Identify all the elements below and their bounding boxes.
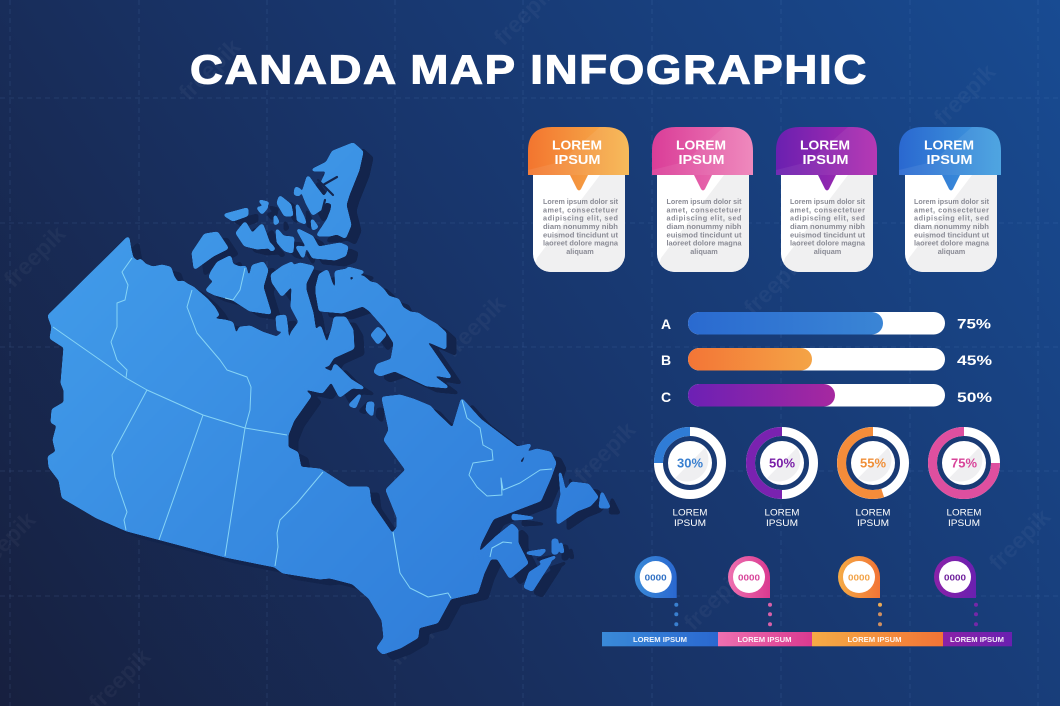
bar B — [661, 348, 993, 370]
map shadow — [59, 150, 619, 659]
card text: adipiscing elit, sed — [666, 214, 742, 223]
card text — [790, 197, 866, 256]
watermarks: freepik — [678, 563, 750, 635]
watermarks: freepik — [738, 248, 810, 320]
bar A: 75% — [957, 316, 992, 332]
card text: amet, consectetuer — [914, 205, 989, 214]
card text: Lorem ipsum dolor sit — [914, 197, 990, 206]
donut 30%: LOREM — [672, 508, 708, 518]
watermarks: freepik — [928, 58, 1000, 130]
card text: amet, consectetuer — [543, 205, 618, 214]
card text: Lorem ipsum dolor sit — [790, 197, 866, 206]
card header — [652, 127, 753, 190]
card text: amet, consectetuer — [666, 205, 742, 214]
province borders — [53, 258, 552, 598]
bar C: 50% — [957, 389, 993, 405]
card 2: LOREM — [676, 138, 726, 152]
card text: adipiscing elit, sed — [790, 214, 865, 223]
pin purple: 0000 — [944, 572, 966, 582]
card text: Lorem ipsum dolor sit — [666, 197, 742, 206]
donut 75%: LOREM — [946, 508, 982, 518]
card text: aliquam — [814, 247, 842, 256]
donut 50% — [750, 432, 814, 528]
donut 55%: 55% — [860, 456, 886, 470]
timeline bar: LOREM IPSUM — [738, 637, 792, 644]
pin pink — [728, 556, 772, 626]
card text: laoreet dolore magna — [790, 239, 866, 248]
card text: euismod tincidunt ut — [543, 230, 619, 239]
timeline bar: LOREM IPSUM — [848, 637, 902, 644]
card header — [776, 127, 877, 190]
card text: laoreet dolore magna — [666, 239, 742, 248]
title: CANADA MAP INFOGRAPHIC — [190, 46, 868, 92]
watermarks: freepik — [983, 503, 1055, 575]
donut 75%: 75% — [951, 456, 977, 470]
card 3: IPSUM — [802, 152, 848, 167]
watermarks: freepik — [173, 33, 245, 105]
card 4: LOREM — [924, 138, 974, 152]
card text: diam nonummy nibh — [543, 222, 618, 231]
card 4: IPSUM — [926, 152, 972, 167]
watermarks: freepik — [568, 416, 640, 488]
bar C — [661, 384, 993, 406]
bar B: B — [661, 352, 671, 368]
pin purple — [934, 556, 978, 626]
watermarks: freepik — [263, 473, 335, 545]
donut 50%: 50% — [769, 456, 795, 470]
card text: diam nonummy nibh — [914, 222, 989, 231]
card text: diam nonummy nibh — [790, 222, 865, 231]
card 4 — [899, 127, 1001, 272]
card text: adipiscing elit, sed — [914, 214, 989, 223]
donut 55% — [842, 432, 904, 528]
timeline bar — [602, 632, 1012, 646]
card text: diam nonummy nibh — [666, 222, 742, 231]
map land — [49, 144, 609, 653]
card 2 — [652, 127, 753, 272]
bar C: C — [661, 389, 671, 405]
map of Canada — [49, 144, 619, 659]
bar B: 45% — [957, 352, 993, 368]
watermarks: freepik — [128, 346, 200, 418]
pin blue — [635, 556, 678, 626]
donut 50%: IPSUM — [766, 518, 798, 528]
card 1: LOREM — [552, 138, 602, 152]
card text: laoreet dolore magna — [914, 239, 990, 248]
donut 55%: LOREM — [856, 508, 890, 518]
watermarks: freepik — [0, 220, 70, 292]
card text — [914, 197, 990, 256]
card 2: IPSUM — [678, 152, 724, 167]
card text: euismod tincidunt ut — [666, 230, 742, 239]
card text — [666, 197, 742, 256]
card text: euismod tincidunt ut — [914, 230, 990, 239]
donut 30%: IPSUM — [674, 518, 706, 528]
watermarks: freepik — [438, 290, 510, 362]
card text: aliquam — [566, 247, 594, 256]
donut 30%: 30% — [677, 456, 703, 470]
card 1: IPSUM — [554, 152, 600, 167]
card body — [905, 150, 997, 272]
card text — [543, 197, 619, 256]
card text: Lorem ipsum dolor sit — [543, 197, 619, 206]
card text: adipiscing elit, sed — [543, 214, 618, 223]
bar A — [661, 312, 992, 334]
card header — [899, 127, 1001, 190]
donut 55%: IPSUM — [857, 518, 889, 528]
card header — [528, 127, 629, 190]
card 1 — [528, 127, 629, 272]
pin blue: 0000 — [645, 572, 667, 582]
donut 75% — [932, 432, 996, 528]
donut 50%: LOREM — [764, 508, 800, 518]
card text: laoreet dolore magna — [543, 239, 619, 248]
bar A: A — [661, 316, 671, 332]
card text: aliquam — [690, 247, 718, 256]
card 3 — [776, 127, 877, 272]
card body — [657, 150, 749, 272]
card text: amet, consectetuer — [790, 205, 865, 214]
card body — [533, 150, 625, 272]
donut 30% — [658, 432, 722, 528]
watermarks: freepik — [383, 598, 455, 670]
bar chart — [661, 312, 993, 406]
timeline bar: LOREM IPSUM — [950, 637, 1004, 644]
pin orange: 0000 — [848, 572, 870, 582]
pin orange — [838, 556, 882, 626]
card text: euismod tincidunt ut — [790, 230, 866, 239]
donut 75%: IPSUM — [948, 518, 980, 528]
Ellesmere fjords — [318, 177, 337, 212]
card text: aliquam — [938, 247, 966, 256]
timeline bar: LOREM IPSUM — [633, 637, 687, 644]
pin pink: 0000 — [738, 572, 760, 582]
card 3: LOREM — [800, 138, 850, 152]
card body — [781, 150, 873, 272]
